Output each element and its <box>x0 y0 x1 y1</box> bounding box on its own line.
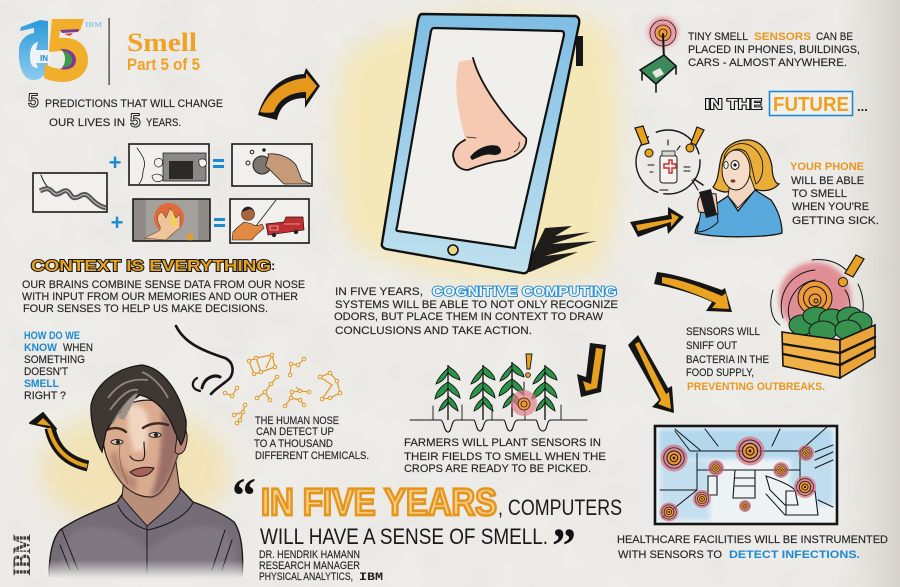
heading: in the future: FUTURE <box>773 94 849 116</box>
subtitle: 5 predictions <box>28 91 223 132</box>
heading: Smell: Smell <box>127 28 197 57</box>
text: human nose: DIFFERENT CHEMICALS. <box>255 450 369 462</box>
nose line drawing <box>176 326 233 394</box>
text: human nose: THE HUMAN NOSE <box>255 415 339 427</box>
text: tiny smell sensors: TINY SMELL <box>688 31 748 43</box>
text: healthcare: DETECT INFECTIONS. <box>729 549 860 561</box>
shirt <box>695 190 782 237</box>
quote attribution <box>259 549 383 584</box>
text: cognitive computing: CONCLUSIONS AND TAKE ACTION. <box>335 325 532 337</box>
subtitle: 5 predictions: 5 <box>28 91 39 112</box>
quote marks close: ” <box>552 517 576 573</box>
text: your phone: WILL BE ABLE <box>791 175 864 187</box>
text: tiny smell sensors <box>688 31 860 69</box>
text: sensors will sniff: PREVENTING OUTBREAKS. <box>687 381 825 393</box>
text: sensors will sniff <box>686 326 825 393</box>
text: your phone <box>790 161 879 227</box>
heading: in the future: ... <box>857 99 868 114</box>
tablet <box>382 14 597 273</box>
text: tiny smell sensors: CAN BE <box>816 31 853 43</box>
diagram: hand on dial box <box>232 144 312 186</box>
quote attribution: PHYSICAL ANALYTICS, <box>259 571 353 583</box>
text: healthcare <box>617 534 888 561</box>
logo: IBM 5 in 5: IBM <box>85 21 102 29</box>
nose on screen <box>453 60 525 170</box>
text: human nose: CAN DETECT UP <box>256 426 334 438</box>
bottom fade <box>44 560 248 578</box>
neck <box>122 462 180 526</box>
text: how do we know: SOMETHING <box>24 354 85 366</box>
text: farmers: THEIR FIELDS TO SMELL WHEN THE <box>404 451 606 463</box>
text: how do we know: RIGHT ? <box>24 390 66 402</box>
arrow: to hospital <box>628 335 674 413</box>
text: our brains: FOUR SENSES TO HELP US MAKE DECISIONS. <box>23 303 268 315</box>
text: cognitive computing <box>334 283 618 337</box>
text: how do we know: HOW DO WE <box>24 330 80 342</box>
quote attribution: IBM <box>359 572 383 584</box>
tablet shadow <box>524 226 597 272</box>
arrow: to tablet <box>258 68 320 120</box>
quote attribution: RESEARCH MANAGER <box>259 560 360 572</box>
crop field with sensor <box>410 354 587 432</box>
heading: in the future: IN THE <box>705 96 762 113</box>
text: your phone: YOUR PHONE <box>790 161 864 173</box>
text: our brains: OUR BRAINS COMBINE SENSE DATA FROM OUR NOSE <box>22 279 305 291</box>
face <box>722 150 750 190</box>
text: cognitive computing: IN FIVE YEARS, <box>335 286 423 298</box>
text: farmers: FARMERS WILL PLANT SENSORS IN <box>404 437 601 449</box>
quote: in five years: , COMPUTERS <box>498 495 622 520</box>
molecules: chemicals <box>223 353 342 425</box>
quote: in five years: WILL HAVE A SENSE OF SMELL. <box>260 524 548 549</box>
jacket <box>49 484 243 577</box>
tablet screen <box>396 28 564 248</box>
hair back <box>713 140 779 192</box>
subtitle: 5 predictions: YEARS. <box>146 117 181 129</box>
text: tiny smell sensors: SENSORS <box>754 31 811 43</box>
illustration: crate with sensor <box>771 255 875 378</box>
text: sensors will sniff: SENSORS WILL <box>686 326 760 338</box>
divider <box>108 18 110 85</box>
text: how do we know <box>24 330 93 402</box>
diagram: oven box <box>129 144 209 185</box>
text: your phone: TO SMELL <box>792 188 847 200</box>
subtitle: 5 predictions: PREDICTIONS THAT WILL CHANGE <box>45 98 223 110</box>
ear <box>175 427 187 454</box>
quote: in five years <box>260 482 622 549</box>
logo: IBM 5 in 5 <box>19 19 102 82</box>
fringe <box>724 144 763 184</box>
heading: in the future <box>705 92 868 116</box>
icon: medicine alert bubble <box>635 126 704 194</box>
text: tiny smell sensors: CARS - ALMOST ANYWHERE. <box>688 57 847 69</box>
arrow: to portrait question <box>30 413 88 466</box>
IBM vertical logo: IBM <box>9 534 36 576</box>
side buttons <box>576 36 583 66</box>
text: cognitive computing: COGNITIVE COMPUTING <box>432 283 617 299</box>
heading: Smell: Part 5 of 5 <box>127 55 200 74</box>
text: your phone: WHEN YOU'RE <box>792 201 869 213</box>
portrait: Dr. Hendrik Hamann <box>44 365 248 578</box>
text: sensors will sniff: BACTERIA IN THE <box>686 354 769 366</box>
quote attribution: DR. HENDRIK HAMANN <box>259 549 360 561</box>
quote marks open: “ <box>232 467 256 523</box>
text: sensors will sniff: FOOD SUPPLY, <box>686 367 754 379</box>
text: cognitive computing: ODORS, BUT PLACE THEM IN CONTEXT TO DRAW <box>334 311 604 323</box>
text: tiny smell sensors: PLACED IN PHONES, BUILDINGS, <box>688 44 860 56</box>
text: human nose <box>254 415 369 462</box>
text: healthcare: HEALTHCARE FACILITIES WILL BE INSTRUMENTED <box>617 534 888 546</box>
face <box>103 400 183 497</box>
text: our brains: WITH INPUT FROM OUR MEMORIES AND OUR OTHER <box>22 291 298 303</box>
text: how do we know: DOESN'T <box>24 366 68 378</box>
text: your phone: GETTING SICK. <box>792 215 879 227</box>
text: how do we know: KNOW <box>24 342 58 354</box>
logo: IBM 5 in 5: IN <box>40 54 48 63</box>
arrow: to woman <box>630 207 684 237</box>
nose and mouth <box>130 442 145 461</box>
text: our brains <box>22 279 305 315</box>
subtitle: 5 predictions: OUR LIVES IN <box>49 117 125 129</box>
arrow: down to farm <box>577 343 606 397</box>
wash behind tablet <box>336 12 619 281</box>
plus sign: + <box>109 150 121 175</box>
text: cognitive computing: SYSTEMS WILL BE ABLE TO NOT ONLY RECOGNIZE <box>335 299 618 311</box>
text: farmers: CROPS ARE READY TO BE PICKED. <box>404 463 591 475</box>
text: sensors will sniff: SNIFF OUT <box>686 340 737 352</box>
home button <box>448 245 458 255</box>
text: healthcare: WITH SENSORS TO <box>618 549 722 561</box>
diagram: nose smell box <box>33 173 107 212</box>
arrow: to crate <box>654 272 732 312</box>
equals sign <box>214 218 225 227</box>
text: human nose: TO A THOUSAND <box>254 438 333 450</box>
eyes and brows <box>104 423 168 432</box>
quote: in five years: IN FIVE YEARS <box>261 482 497 524</box>
heading: context is everything: : <box>271 258 275 273</box>
equals sign <box>213 159 224 168</box>
diagram: phone call and fire truck box <box>230 199 309 243</box>
icon: wireless sensor board <box>640 17 678 92</box>
subtitle: 5 predictions: 5 <box>130 111 141 132</box>
illustration: woman with phone <box>694 140 782 237</box>
hair <box>91 365 186 452</box>
heading: Smell <box>127 28 200 74</box>
text: how do we know: SMELL <box>24 378 59 390</box>
text: farmers <box>404 437 606 475</box>
text: how do we know: WHEN <box>63 342 93 354</box>
hospital room with sensors <box>655 425 837 524</box>
diagram: hand on hot door box <box>133 199 210 241</box>
plus sign: + <box>111 210 123 235</box>
wash behind portrait <box>40 410 230 530</box>
heading: context is everything: CONTEXT IS EVERYTHING <box>31 258 271 275</box>
